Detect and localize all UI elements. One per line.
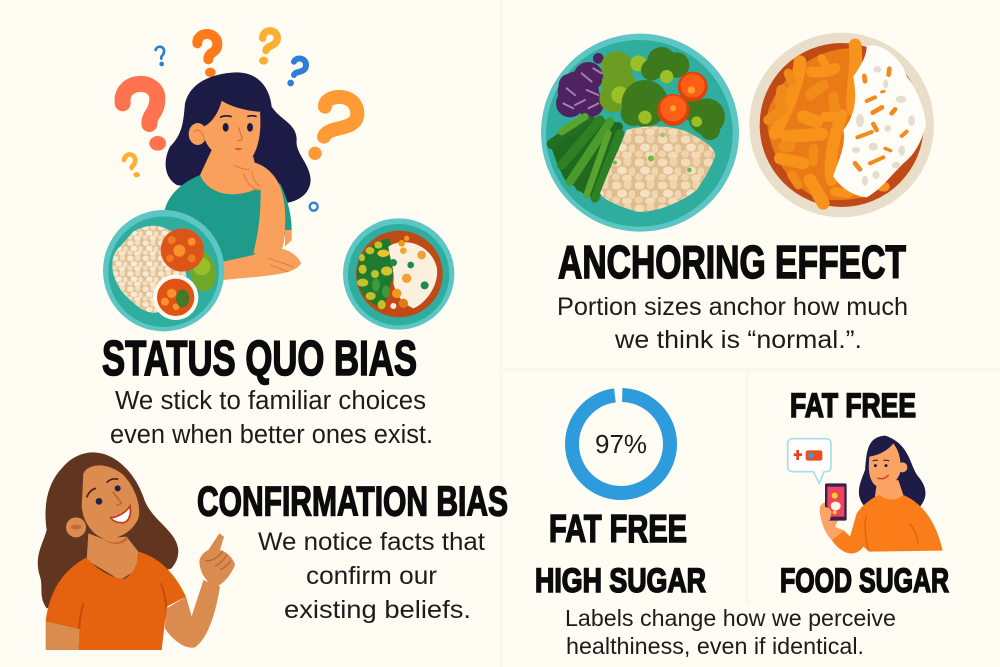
heading: high sugar: HIGH SUGAR [535, 562, 706, 600]
text: confirmation description [258, 528, 485, 624]
text: labels description: healthiness, even if identical. [566, 633, 864, 659]
illustration: woman with phone [788, 436, 943, 553]
icon: question marks [123, 31, 357, 211]
icon: phone [825, 483, 847, 521]
panel: framing labels [535, 387, 949, 659]
icon: plate with greens and rice [343, 218, 454, 330]
text: status quo description [110, 387, 433, 449]
text: anchoring description [557, 293, 908, 354]
chart: 97% donut: 97% [595, 431, 647, 459]
text: status quo description: even when better ones exist. [110, 421, 433, 449]
icon: speech bubble [788, 439, 831, 483]
panel: status quo bias [102, 31, 454, 449]
heading: confirmation bias: CONFIRMATION BIAS [197, 478, 508, 524]
text: labels description [565, 605, 896, 659]
text: confirmation description: We notice facts that [258, 528, 485, 556]
heading: fat free right: FAT FREE [790, 387, 916, 425]
panel: anchoring effect [541, 33, 934, 354]
text: anchoring description: Portion sizes anchor how much [557, 293, 908, 321]
green beans [550, 115, 622, 198]
heading: fat free left: FAT FREE [549, 508, 687, 551]
icon: beige bowl with carrots and white sauce [749, 33, 934, 217]
icon: plate with rice and curry [103, 210, 224, 331]
heading: status quo bias: STATUS QUO BIAS [102, 332, 417, 386]
icon: teal plate with vegetables [541, 34, 739, 232]
figure: woman [164, 72, 311, 280]
illustration: two plates [541, 33, 934, 232]
chart: 97% donut [572, 395, 670, 493]
panel: confirmation bias [38, 452, 508, 650]
text: confirmation description: confirm our [306, 562, 437, 590]
text: status quo description: We stick to familiar choices [115, 387, 426, 415]
text: anchoring description: we think is “normal.”. [614, 326, 862, 354]
text: labels description: Labels change how we perceive [565, 605, 896, 631]
illustration: pointing woman [38, 452, 235, 650]
illustration: thinking woman with question marks and plates [103, 31, 454, 331]
text: confirmation description: existing beliefs. [284, 596, 471, 624]
